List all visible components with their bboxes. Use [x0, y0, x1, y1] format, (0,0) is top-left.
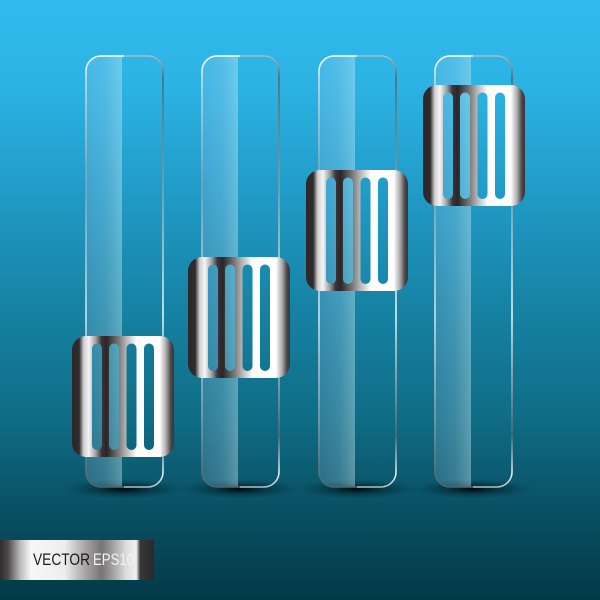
glass track 1	[86, 56, 163, 487]
metal slider handle 4	[423, 85, 525, 206]
metal slider handle 1	[72, 336, 174, 457]
glass track 2	[202, 56, 279, 487]
label plate: vector eps10: VECTOR	[33, 550, 90, 569]
glass track 4	[435, 56, 512, 487]
metal slider handle 2	[188, 257, 290, 378]
glass track 3	[319, 56, 396, 487]
label plate: vector eps10	[0, 540, 154, 580]
label plate: vector eps10: EPS10	[93, 550, 134, 569]
metal slider handle 3	[306, 170, 408, 291]
shadows under sliders	[62, 479, 535, 499]
